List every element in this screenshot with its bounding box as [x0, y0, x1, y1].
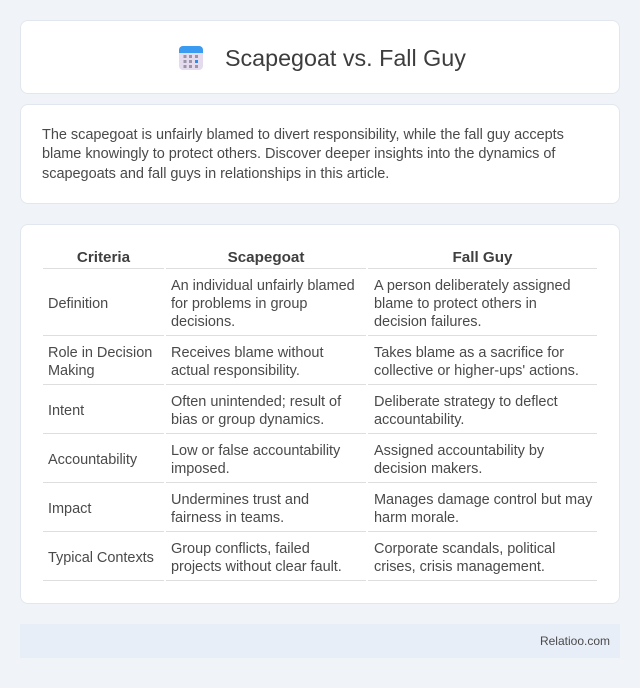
row: Impact [48, 492, 592, 526]
fall guy cell: decision failures. [374, 314, 481, 330]
row: Definition [48, 278, 571, 330]
panel: title card [20, 20, 620, 94]
label: Intent [48, 403, 84, 419]
fall guy cell [374, 492, 592, 526]
fall guy cell: Deliberate strategy to deflect [374, 394, 558, 410]
fall guy cell: accountability. [374, 412, 464, 428]
label: Making [48, 363, 95, 379]
fall guy cell: crises, crisis management. [374, 559, 545, 575]
fall guy cell [374, 394, 558, 428]
intro text [42, 127, 564, 182]
label: Typical Contexts [48, 550, 154, 566]
fall guy cell: A person deliberately assigned [374, 278, 571, 294]
label: Impact [48, 501, 91, 517]
scapegoat cell: An individual unfairly blamed [171, 278, 355, 294]
title: Scapegoat vs. Fall Guy [225, 45, 466, 71]
intro text: blame knowingly to protect others. Discover deeper insights into the dynamics of [42, 146, 555, 162]
scapegoat cell: Often unintended; result of [171, 394, 341, 410]
label: Accountability [48, 452, 137, 468]
scapegoat cell [171, 443, 340, 477]
fall guy cell: collective or higher-ups' actions. [374, 363, 579, 379]
scapegoat cell [171, 541, 342, 575]
fall guy cell [374, 278, 571, 330]
label: Definition [48, 296, 108, 312]
scapegoat cell: Group conflicts, failed [171, 541, 310, 557]
scapegoat cell: Low or false accountability [171, 443, 340, 459]
panel: comparison table [20, 224, 620, 604]
scapegoat cell [171, 345, 324, 379]
icon: calendar [179, 46, 203, 70]
row: Intent [48, 394, 558, 428]
fall guy cell: Assigned accountability by [374, 443, 544, 459]
fall guy cell: Takes blame as a sacrifice for [374, 345, 564, 361]
column header: Fall Guy: Fall Guy [453, 249, 512, 266]
intro text: scapegoats and fall guys in relationships in this article. [42, 166, 389, 182]
fall guy cell: decision makers. [374, 461, 482, 477]
fall guy cell [374, 345, 579, 379]
fall guy cell: Corporate scandals, political [374, 541, 555, 557]
footer credit: Relatioo.com [540, 634, 610, 648]
column header: Scapegoat: Scapegoat [228, 249, 304, 266]
scapegoat cell: Undermines trust and [171, 492, 309, 508]
panel: introduction [20, 104, 620, 204]
row: Accountability [48, 443, 544, 477]
scapegoat cell: actual responsibility. [171, 363, 300, 379]
scapegoat cell [171, 278, 355, 330]
scapegoat cell: imposed. [171, 461, 230, 477]
scapegoat cell: decisions. [171, 314, 235, 330]
fall guy cell [374, 443, 544, 477]
row: Role in Decision Making [48, 345, 579, 379]
scapegoat cell: fairness in teams. [171, 510, 284, 526]
column header: Criteria: Criteria [77, 249, 130, 266]
label [48, 345, 152, 379]
scapegoat cell: projects without clear fault. [171, 559, 342, 575]
fall guy cell: harm morale. [374, 510, 459, 526]
row: Typical Contexts [48, 541, 555, 575]
label: Role in Decision [48, 345, 152, 361]
fall guy cell: blame to protect others in [374, 296, 537, 312]
scapegoat cell [171, 492, 309, 526]
footer bar [20, 624, 620, 658]
fall guy cell: Manages damage control but may [374, 492, 592, 508]
intro text: The scapegoat is unfairly blamed to divert responsibility, while the fall guy accepts [42, 127, 564, 143]
scapegoat cell: Receives blame without [171, 345, 323, 361]
scapegoat cell: for problems in group [171, 296, 307, 312]
scapegoat cell [171, 394, 342, 428]
scapegoat cell: bias or group dynamics. [171, 412, 324, 428]
fall guy cell [374, 541, 555, 575]
